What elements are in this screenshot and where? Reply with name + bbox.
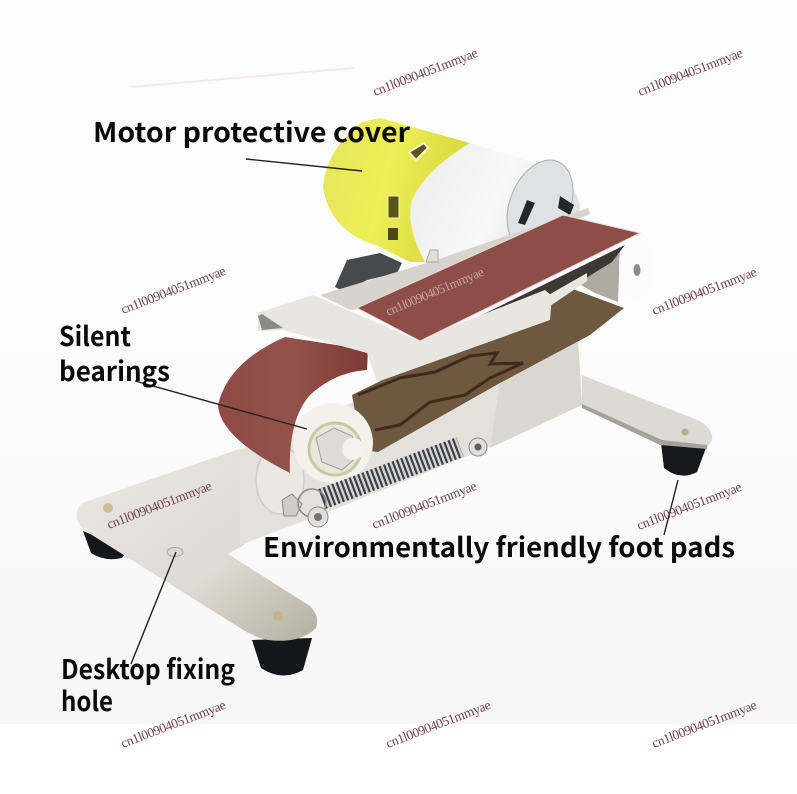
watermarks: cn1l00904051mmyae (650, 697, 759, 751)
watermarks (105, 45, 759, 751)
vent slot: top (409, 143, 428, 160)
leader: motor cover (246, 159, 362, 171)
guide strip (545, 273, 587, 306)
roller bearing (309, 423, 361, 475)
right roller bolt (634, 264, 640, 276)
base plate: right arm (582, 375, 712, 448)
base plate: left arm (76, 448, 317, 641)
desktop fixing hole (167, 548, 183, 556)
leader: silent bearings (135, 381, 307, 429)
faint pink streak (130, 68, 354, 87)
right arm lower edge (582, 404, 707, 449)
leader: fixing hole (131, 552, 176, 664)
vent slot: side (388, 196, 399, 218)
watermarks: cn1l00904051mmyae (119, 263, 228, 317)
upper belt (357, 215, 640, 341)
screw socket right (474, 444, 482, 450)
stand panel shade (490, 340, 582, 448)
product: belt sander (76, 118, 712, 676)
motor body (410, 143, 580, 262)
left roller (293, 403, 373, 483)
foot: front (252, 638, 312, 676)
right roller (619, 229, 653, 301)
roller bolt (342, 438, 364, 460)
screw: back plate (103, 503, 113, 513)
foot: back left (83, 531, 128, 559)
roller bracket disc (256, 446, 304, 514)
leader: foot pads (664, 480, 678, 535)
screw: right arm (682, 428, 688, 436)
screw socket left (314, 513, 322, 521)
label: silent bearings line 2: bearings (59, 350, 170, 389)
screw head right (469, 438, 487, 456)
lower belt loop (218, 337, 368, 473)
screw: spring right (469, 438, 487, 456)
motor end cap (495, 150, 585, 260)
platen strip (320, 208, 590, 310)
watermarks: cn1l00904051mmyae (384, 697, 493, 751)
screw: spring left (308, 507, 328, 527)
label: silent bearings: Silent (59, 315, 131, 354)
watermarks: cn1l00904051mmyae (371, 45, 480, 99)
inner belt (brown underside) (352, 288, 624, 452)
screw: front plate (273, 611, 283, 621)
label: foot pads: Environmentally friendly foot pads (263, 526, 735, 565)
yellow motor cover (323, 118, 470, 262)
screw head left (308, 507, 328, 527)
watermarks: cn1l00904051mmyae (650, 264, 759, 318)
label: fixing hole: Desktop fixing (61, 648, 235, 687)
stand upright panel (240, 340, 582, 545)
vent slot: lower (388, 228, 398, 240)
motor vents (518, 196, 574, 225)
foot: right (661, 443, 706, 476)
watermarks: cn1l00904051mmyae (636, 45, 745, 99)
watermarks: cn1l00904051mmyae (105, 478, 214, 532)
watermark on belt: cn1l00904051mmyae (383, 264, 486, 319)
underside logo (358, 353, 523, 430)
right roller housing (572, 247, 620, 302)
gap shadow under upper belt (420, 245, 625, 345)
spring bracket nut (282, 494, 302, 516)
white bottom strip (0, 724, 797, 794)
locking knob (335, 253, 402, 292)
platen tab (426, 250, 438, 262)
spring (322, 447, 460, 499)
label: fixing hole line 2: hole (61, 680, 113, 719)
watermarks: cn1l00904051mmyae (635, 479, 744, 533)
watermarks: cn1l00904051mmyae (370, 478, 479, 532)
spring body (322, 447, 460, 499)
spring hook (298, 489, 326, 517)
roller nut (316, 428, 358, 470)
watermarks: cn1l00904051mmyae (119, 697, 228, 751)
guard plate (258, 290, 552, 382)
spring coils (322, 447, 460, 499)
label: motor cover: Motor protective cover (93, 111, 410, 150)
guard notch shadow (258, 314, 283, 330)
